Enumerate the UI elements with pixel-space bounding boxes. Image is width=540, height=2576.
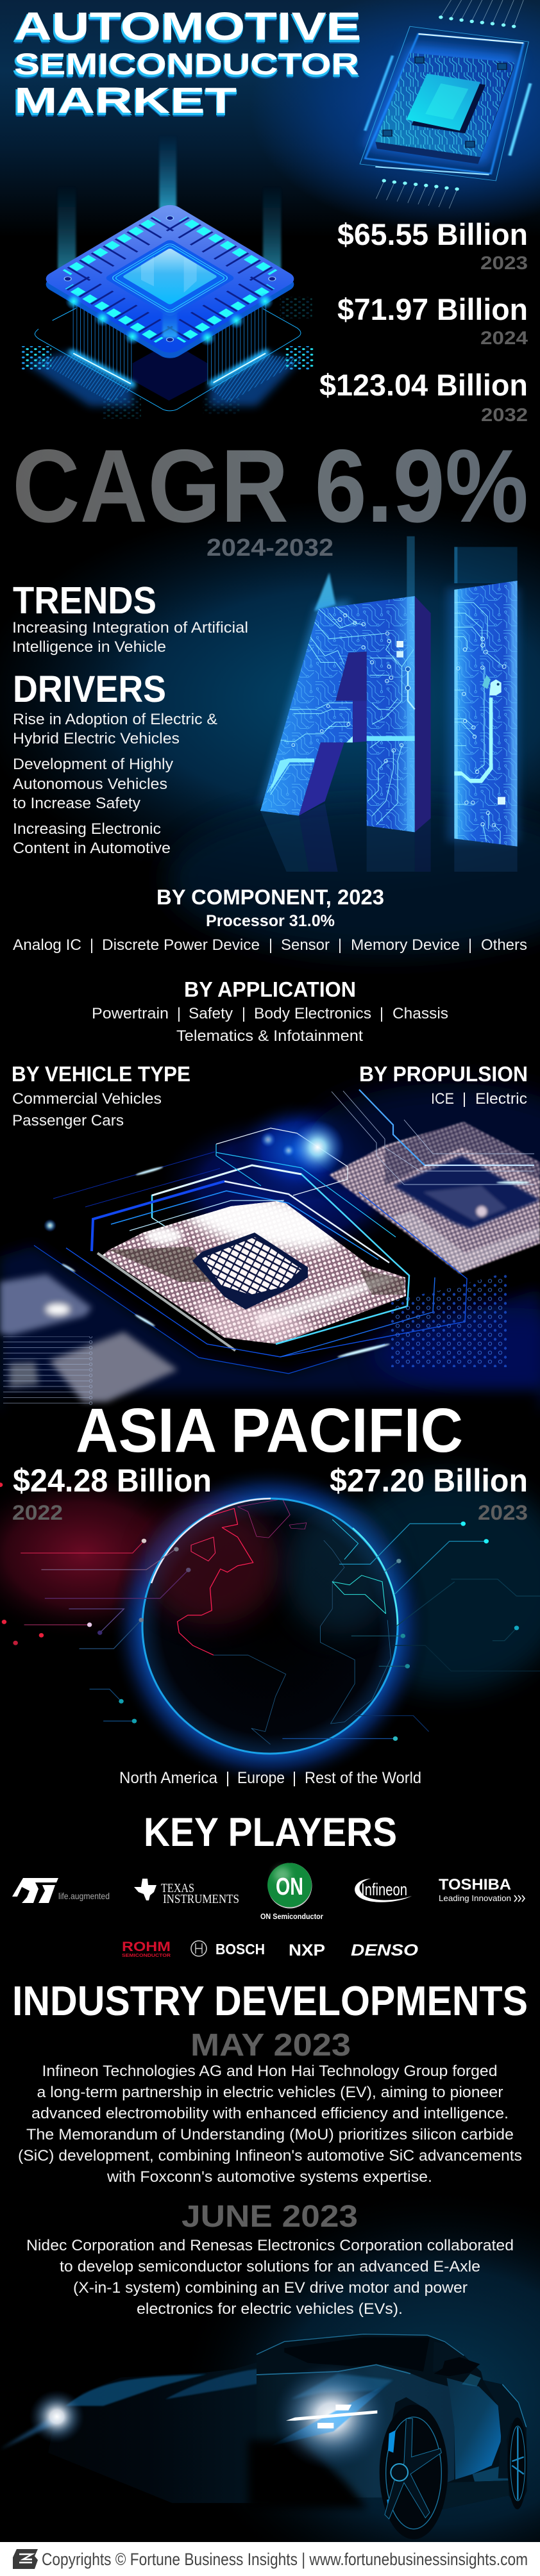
door panel bbox=[447, 2378, 502, 2479]
header background gradient bbox=[0, 0, 540, 237]
application list: | bbox=[242, 1005, 246, 1022]
title: MARKET bbox=[13, 84, 237, 125]
fender fade into shadow bbox=[248, 2440, 367, 2508]
logo: ON Semiconductor bbox=[260, 1863, 323, 1921]
logo: Toshiba: Leading Innovation bbox=[439, 1893, 511, 1903]
region heading: ASIA PACIFIC bbox=[76, 1395, 463, 1465]
component list: Analog IC bbox=[13, 936, 81, 954]
bright streaks bbox=[62, 1166, 530, 1359]
light pillars bbox=[72, 303, 266, 385]
logo: Toshiba: TOSHIBA bbox=[439, 1876, 511, 1893]
title: MARKET bbox=[13, 82, 237, 123]
right processor bbox=[329, 1122, 540, 1274]
rear wheel bbox=[507, 2418, 527, 2509]
component list: | bbox=[338, 936, 342, 954]
continents bbox=[178, 1499, 391, 1744]
by component heading: BY COMPONENT, 2023 bbox=[156, 885, 384, 909]
reflection bbox=[260, 803, 518, 872]
headlight glow bbox=[274, 2363, 389, 2470]
fender bbox=[257, 2365, 454, 2498]
application list: | bbox=[380, 1005, 384, 1022]
application list: Chassis bbox=[392, 1005, 448, 1022]
logo: ST bbox=[12, 1878, 110, 1903]
value 2032: $123.04 Billion bbox=[319, 368, 528, 402]
chip illustration lower left bbox=[21, 135, 314, 419]
june 2023 text bbox=[26, 2237, 514, 2318]
car background glow bbox=[173, 2186, 540, 2576]
dashed connector lines bbox=[0, 1336, 94, 1406]
may 2023 text: (SiC) development, combining Infineon's automotive SiC advancements bbox=[18, 2147, 522, 2165]
component list: | bbox=[90, 936, 94, 954]
logo: Texas Instruments: INSTRUMENTS bbox=[163, 1892, 239, 1906]
by application heading: BY APPLICATION bbox=[184, 977, 356, 1001]
application list: Telematics & Infotainment bbox=[176, 1027, 363, 1045]
board top bbox=[40, 202, 300, 356]
front wheel bbox=[380, 2405, 448, 2539]
logo: ON Semiconductor: ON bbox=[276, 1874, 303, 1900]
other regions: | bbox=[292, 1769, 296, 1787]
blurred chips at left bbox=[0, 1274, 178, 1402]
title: AUTOMOTIVE bbox=[13, 8, 361, 52]
title: AUTOMOTIVE bbox=[14, 4, 361, 48]
AI section glow background bbox=[0, 500, 540, 897]
may 2023 text: with Foxconn's automotive systems expertise. bbox=[106, 2168, 432, 2186]
lower edge glow spots bbox=[65, 293, 274, 346]
drivers text: Autonomous Vehicles bbox=[13, 776, 167, 793]
letter I bbox=[453, 580, 518, 848]
component list: Discrete Power Device bbox=[102, 936, 260, 954]
title: SEMICONDUCTOR bbox=[13, 49, 359, 83]
may 2023 text: advanced electromobility with enhanced efficiency and intelligence. bbox=[31, 2105, 509, 2122]
glow beams bbox=[58, 135, 281, 280]
region value 2022: $24.28 Billion bbox=[13, 1463, 212, 1499]
circuit lines bbox=[34, 1090, 534, 1374]
region value 2022: 2022 bbox=[12, 1501, 63, 1524]
logo: Rohm: ROHM bbox=[122, 1940, 171, 1954]
by vehicle type heading: BY VEHICLE TYPE bbox=[12, 1062, 190, 1086]
footer logo bbox=[13, 2549, 38, 2569]
drivers heading: DRIVERS bbox=[13, 669, 166, 710]
other regions: Rest of the World bbox=[305, 1769, 421, 1787]
june 2023 text: Nidec Corporation and Renesas Electronics Corporation collaborated bbox=[26, 2237, 514, 2254]
propulsion list bbox=[431, 1090, 527, 1108]
may 2023 text bbox=[18, 2063, 522, 2186]
logo: ON Semiconductor: ON Semiconductor bbox=[260, 1912, 323, 1921]
value 2032: 2032 bbox=[481, 405, 528, 426]
die highlights bbox=[141, 256, 197, 293]
application list: Powertrain bbox=[92, 1005, 169, 1022]
application list bbox=[92, 1005, 448, 1045]
component list bbox=[13, 936, 527, 954]
may 2023 text: The Memorandum of Understanding (MoU) prioritizes silicon carbide bbox=[26, 2126, 514, 2143]
june 2023 text: electronics for electric vehicles (EVs). bbox=[137, 2300, 403, 2318]
may 2023 heading: MAY 2023 bbox=[190, 2028, 351, 2063]
title: SEMICONDUCTOR bbox=[14, 47, 359, 81]
car illustration bbox=[0, 2334, 527, 2539]
globe rim bbox=[142, 1499, 398, 1754]
propulsion list: ICE bbox=[431, 1090, 454, 1108]
trends heading: TRENDS bbox=[13, 579, 156, 622]
logo: Bosch bbox=[191, 1941, 265, 1957]
drivers bbox=[13, 669, 217, 857]
application list: Body Electronics bbox=[254, 1005, 371, 1022]
logo: ST: life.augmented bbox=[58, 1891, 110, 1901]
under-chip shadow bbox=[133, 342, 207, 401]
logo: Bosch: BOSCH bbox=[215, 1941, 265, 1957]
title: MARKET bbox=[14, 80, 237, 121]
drivers text: Rise in Adoption of Electric & bbox=[13, 711, 217, 728]
drivers text: Increasing Electronic bbox=[13, 820, 161, 838]
base plate glow and hatch bbox=[26, 351, 303, 406]
may 2023 text: a long-term partnership in electric vehicles (EV), aiming to pioneer bbox=[37, 2084, 503, 2101]
component section background glow bbox=[167, 801, 540, 955]
propulsion list: | bbox=[462, 1090, 466, 1108]
light spots bbox=[44, 1120, 344, 1232]
may 2023 text: Infineon Technologies AG and Hon Hai Technology Group forged bbox=[42, 2063, 498, 2080]
title bbox=[13, 4, 361, 125]
by propulsion heading: BY PROPULSION bbox=[359, 1062, 528, 1086]
by component bbox=[13, 885, 527, 954]
by vehicle type bbox=[12, 1062, 190, 1129]
LED strip bbox=[286, 2411, 377, 2421]
market size figures bbox=[319, 217, 528, 426]
value 2023: 2023 bbox=[480, 253, 528, 274]
dot clusters bbox=[21, 297, 314, 419]
by propulsion bbox=[359, 1062, 528, 1108]
title: AUTOMOTIVE bbox=[13, 6, 361, 50]
component list: | bbox=[269, 936, 273, 954]
drivers text: to Increase Safety bbox=[13, 795, 140, 812]
region value 2022 bbox=[12, 1463, 212, 1524]
drivers text: Hybrid Electric Vehicles bbox=[13, 730, 180, 747]
CAGR period: 2024-2032 bbox=[207, 535, 333, 561]
logo: Rohm bbox=[122, 1940, 171, 1958]
value 2024: 2024 bbox=[480, 328, 528, 349]
globe illustration bbox=[0, 1466, 540, 1786]
application list: Safety bbox=[189, 1005, 233, 1022]
AI letters illustration bbox=[258, 536, 519, 872]
logo: Texas Instruments bbox=[134, 1879, 239, 1906]
logo: Infineon bbox=[355, 1879, 412, 1902]
dotted tech pattern bbox=[389, 1272, 507, 1367]
logo: Toshiba bbox=[439, 1876, 525, 1903]
value 2023: $65.55 Billion bbox=[337, 217, 528, 251]
chip illustration top right bbox=[360, 0, 530, 208]
component list: Memory Device bbox=[351, 936, 460, 954]
value 2023 bbox=[337, 217, 528, 274]
value 2032 bbox=[319, 368, 528, 426]
value 2024: $71.97 Billion bbox=[337, 292, 528, 326]
car body right part bbox=[248, 2334, 527, 2539]
vehicle type list: Commercial Vehicles bbox=[12, 1090, 162, 1108]
car hood left part bbox=[0, 2359, 276, 2503]
footer bar bbox=[0, 2542, 540, 2576]
other regions bbox=[119, 1769, 421, 1787]
logo: Rohm: SEMICONDUCTOR bbox=[122, 1952, 171, 1958]
region value 2023 bbox=[330, 1463, 528, 1524]
application list: | bbox=[177, 1005, 181, 1022]
letter A bbox=[258, 594, 431, 833]
by application bbox=[92, 977, 448, 1045]
title: SEMICONDUCTOR bbox=[13, 51, 359, 85]
june 2023 text: (X-in-1 system) combining an EV drive motor and power bbox=[73, 2279, 468, 2297]
region value 2023: 2023 bbox=[478, 1501, 528, 1524]
component list: Others bbox=[481, 936, 527, 954]
windshield bbox=[284, 2338, 430, 2372]
trends text: Increasing Integration of Artificial bbox=[12, 619, 248, 636]
logo: NXP: NXP bbox=[289, 1941, 325, 1959]
circuit traces bbox=[0, 1483, 540, 1741]
glow streaks bbox=[72, 353, 266, 385]
side mirror bbox=[434, 2357, 480, 2376]
chip photo background bbox=[0, 1083, 540, 1429]
drivers text: Content in Automotive bbox=[13, 840, 171, 857]
logo: Denso: DENSO bbox=[351, 1941, 419, 1959]
trends bbox=[12, 579, 248, 656]
drivers text: Development of Highly bbox=[13, 756, 173, 773]
chip side bbox=[40, 208, 300, 361]
base plate outline bbox=[35, 308, 301, 411]
component list: Sensor bbox=[281, 936, 330, 954]
key players heading: KEY PLAYERS bbox=[144, 1810, 397, 1855]
trends text bbox=[12, 619, 248, 656]
region value 2023: $27.20 Billion bbox=[330, 1463, 528, 1499]
other regions: Europe bbox=[237, 1769, 285, 1787]
value 2024 bbox=[337, 292, 528, 349]
june 2023 text: to develop semiconductor solutions for an advanced E-Axle bbox=[60, 2258, 480, 2275]
other regions: | bbox=[226, 1769, 230, 1787]
main processor bbox=[96, 1201, 406, 1352]
rear haunch bbox=[483, 2380, 527, 2479]
component list: | bbox=[468, 936, 472, 954]
other regions: North America bbox=[119, 1769, 217, 1787]
propulsion list: Electric bbox=[475, 1090, 527, 1108]
logo: Texas Instruments: TEXAS bbox=[161, 1881, 194, 1895]
vehicle type list bbox=[12, 1090, 162, 1129]
drivers text bbox=[13, 711, 217, 857]
june 2023 heading: JUNE 2023 bbox=[181, 2200, 358, 2234]
logo: Infineon: Infineon bbox=[361, 1880, 407, 1899]
vehicle type list: Passenger Cars bbox=[12, 1112, 124, 1129]
processor share: Processor 31.0% bbox=[206, 912, 335, 930]
trends text: Intelligence in Vehicle bbox=[12, 638, 166, 656]
